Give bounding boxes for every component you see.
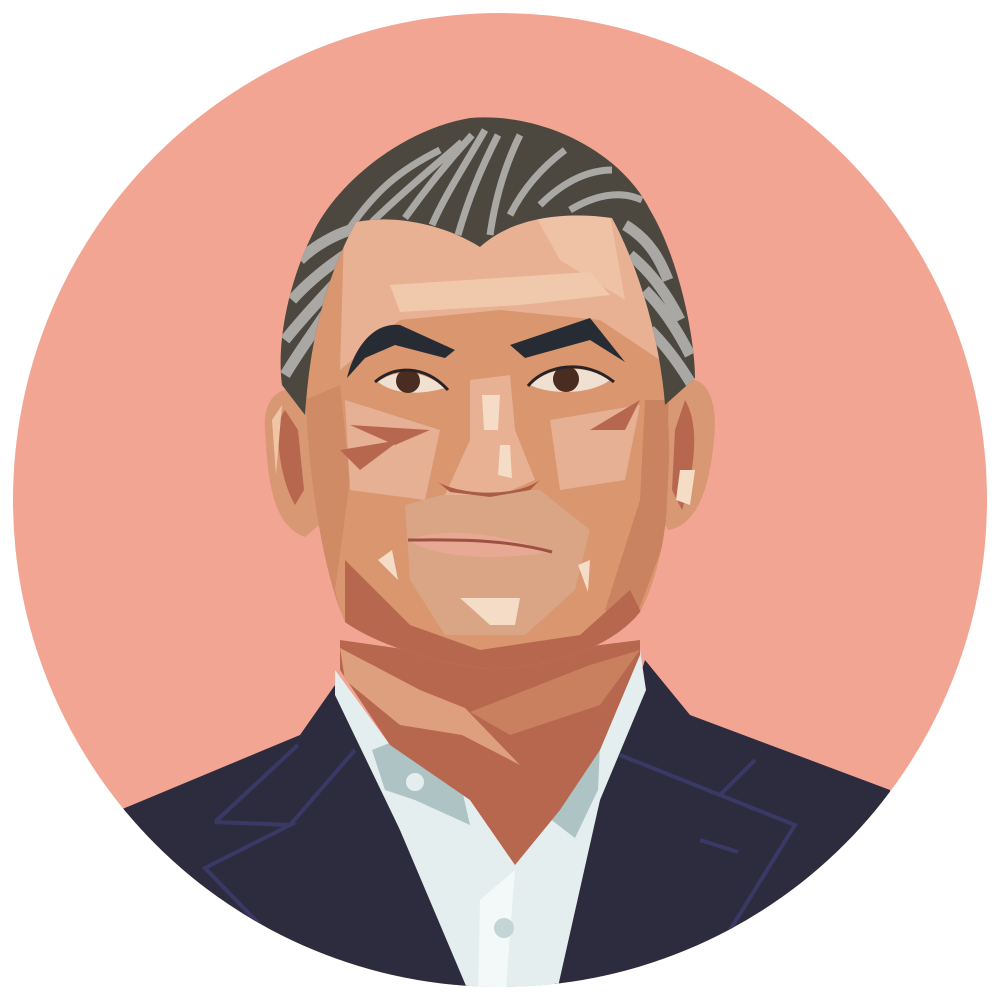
neck — [340, 640, 640, 865]
eyebrows — [347, 318, 625, 378]
shirt — [335, 650, 646, 1000]
ear left — [265, 389, 325, 537]
jacket — [120, 660, 900, 1000]
face — [306, 216, 670, 668]
ear right — [665, 380, 715, 530]
eyes — [375, 366, 614, 393]
mouth — [408, 533, 552, 557]
figure — [120, 110, 900, 1000]
hair — [270, 110, 700, 420]
